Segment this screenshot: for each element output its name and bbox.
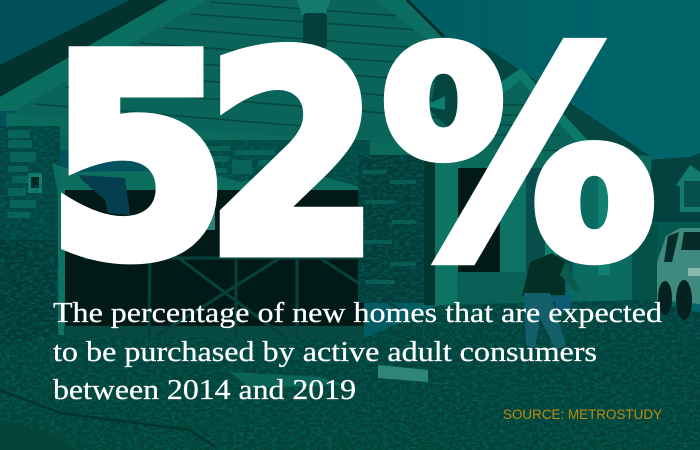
worker: [522, 253, 580, 350]
percent sign: %: [381, 0, 657, 322]
worker on scaffold: [78, 175, 130, 215]
digit 5: 5: [47, 0, 229, 320]
line 1: The percentage of new homes that are expected: [53, 298, 662, 329]
bucket: [197, 204, 215, 230]
line 3: between 2014 and 2019: [53, 375, 356, 406]
description text: [53, 298, 662, 406]
stone wall left: [0, 126, 60, 351]
left fascia: [0, 0, 207, 111]
box on ground: [378, 365, 428, 382]
ground: [0, 300, 700, 450]
porch columns and door: [424, 155, 436, 305]
eave band: [6, 113, 652, 178]
vent: [297, 0, 331, 15]
left roof: [0, 0, 130, 65]
second roof: [430, 37, 650, 160]
stone texture: [0, 126, 633, 345]
neighbouring house: [632, 153, 700, 300]
truck: [657, 228, 700, 320]
right gable fascia of main house: [376, 0, 445, 50]
garage opening: [64, 190, 364, 332]
porch gable trim: [52, 163, 370, 205]
headline: 52%: [47, 0, 657, 322]
line 2: to be purchased by active adult consumers: [53, 337, 597, 368]
digit 2: 2: [206, 0, 379, 316]
scaffolding: [84, 250, 400, 380]
source credit: SOURCE: METROSTUDY: [503, 406, 663, 422]
stone wall porch: [358, 155, 424, 303]
main gable siding: [15, 0, 445, 150]
low stone walls: [457, 272, 532, 305]
stone wall centre: [195, 140, 370, 190]
